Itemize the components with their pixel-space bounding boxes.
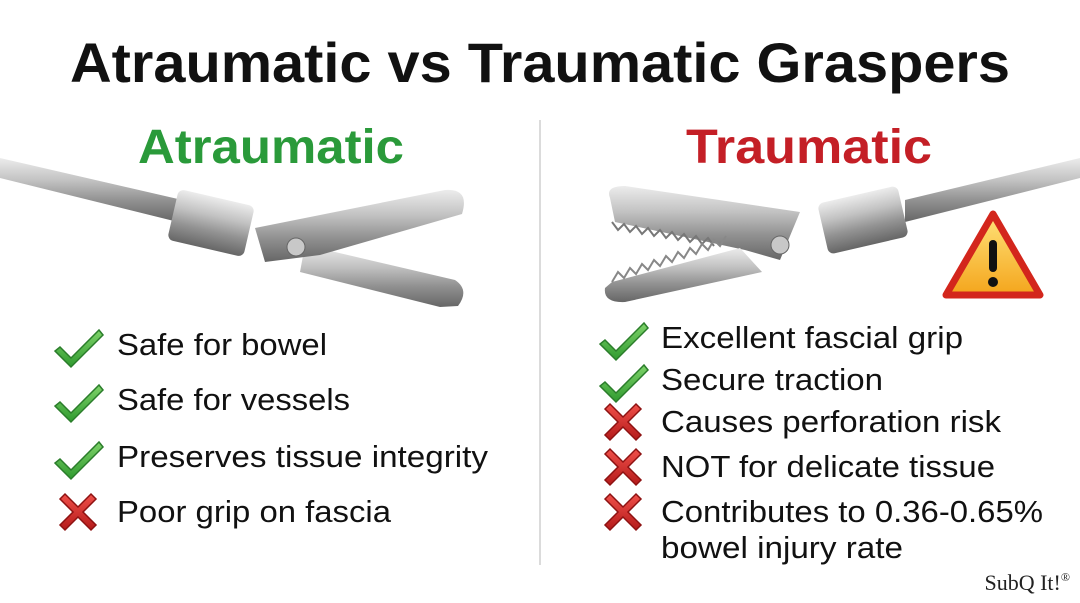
illustration: atraumatic grasper: [0, 158, 464, 307]
item 5: bowel injury rate: [661, 530, 903, 565]
list: atraumatic: [55, 327, 489, 530]
watermark: ®: [1061, 570, 1070, 584]
list: traumatic: [600, 320, 1043, 565]
item 5: Contributes to 0.36-0.65%: [661, 494, 1043, 529]
item 2: Secure traction: [661, 362, 883, 397]
item 3: Preserves tissue integrity: [117, 439, 489, 474]
heading: Atraumatic: Atraumatic: [138, 121, 404, 174]
divider: [539, 120, 541, 565]
item 1: [55, 327, 327, 367]
item 4: Poor grip on fascia: [117, 494, 392, 529]
watermark: SubQ It!: [984, 570, 1061, 595]
illustration: traumatic grasper: [605, 158, 1080, 302]
item 3: Causes perforation risk: [661, 404, 1002, 439]
item 5: [605, 494, 1043, 565]
item 2: Safe for vessels: [117, 382, 350, 417]
item 3: [55, 439, 489, 479]
item 2: [600, 362, 883, 402]
item 1: Excellent fascial grip: [661, 320, 963, 355]
item 1: Safe for bowel: [117, 327, 327, 362]
item 2: [55, 382, 350, 422]
item 1: [600, 320, 963, 360]
icon: warning triangle: [946, 214, 1040, 295]
heading: Traumatic: Traumatic: [686, 121, 932, 174]
title: Atraumatic vs Traumatic Graspers: [70, 31, 1010, 94]
item 4: NOT for delicate tissue: [661, 449, 995, 484]
